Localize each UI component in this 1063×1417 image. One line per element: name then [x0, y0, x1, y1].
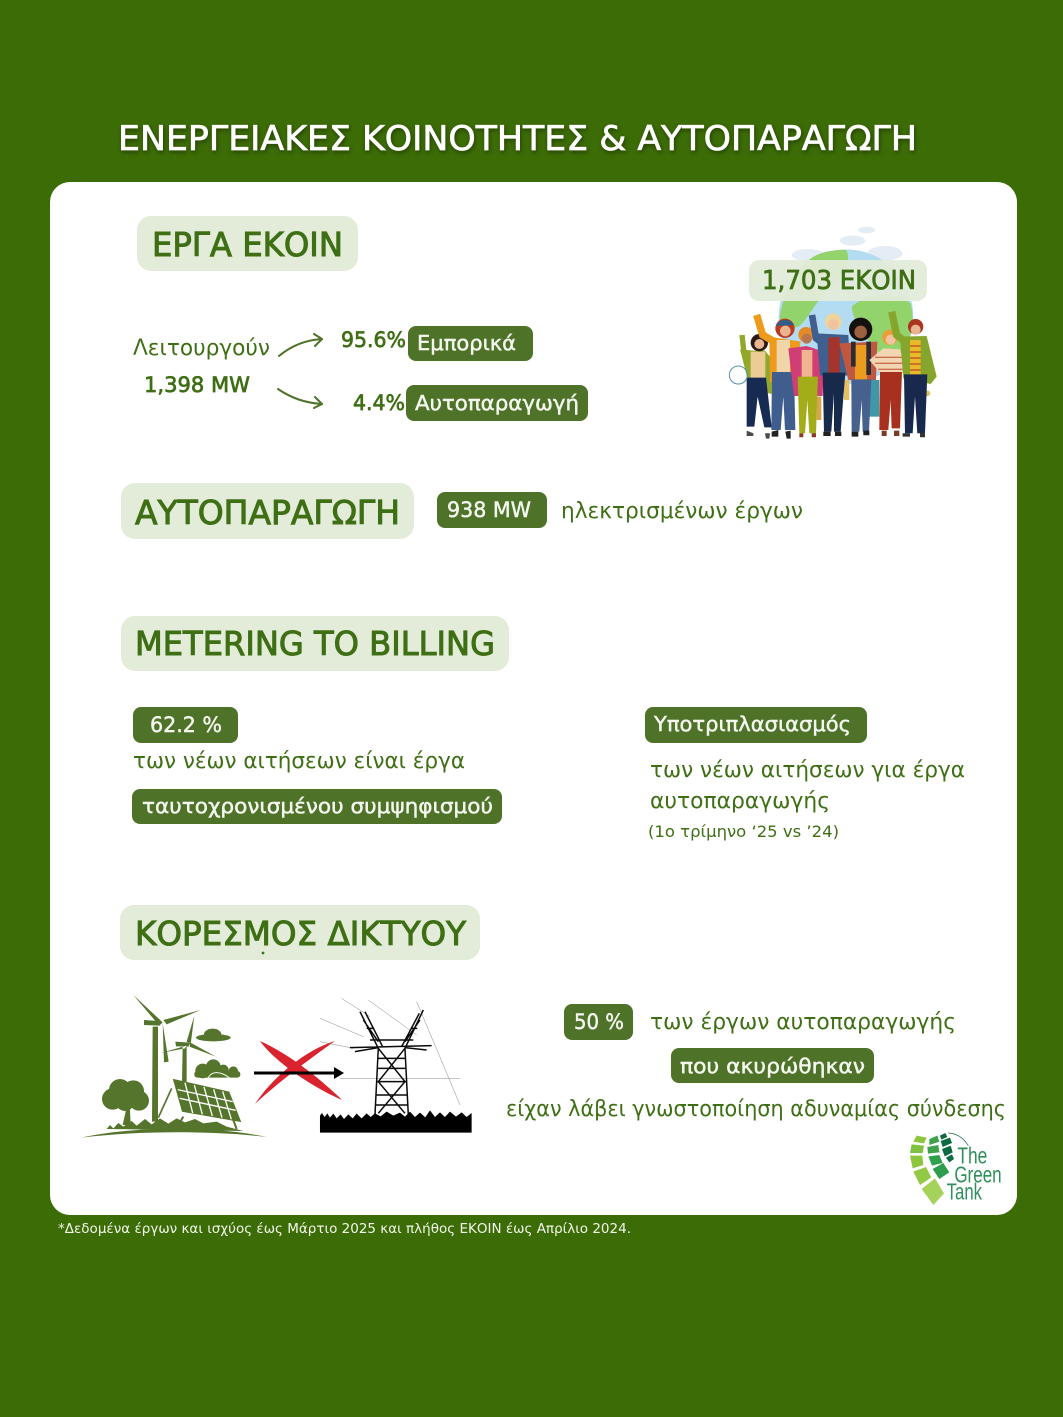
- heading: ΑΥΤΟΠΑΡΑΓΩΓΗ: [121, 483, 414, 539]
- text: electrified projects: ηλεκτρισμένων έργων: [561, 499, 803, 524]
- heading: ΚΟΡΕΣΜΟΣ ΔΙΚΤΥΟΥ: ΚΟΡΕΣΜΟΣ ΔΙΚΤΥΟΥ: [135, 914, 467, 953]
- heading: ΕΡΓΑ ΕΚΟΙΝ: [137, 216, 358, 271]
- cloud 1: [196, 1029, 231, 1041]
- stat: 50 %: 50 %: [574, 1010, 624, 1034]
- illustration: transmission tower: [320, 998, 472, 1133]
- title: ΕΝΕΡΓΕΙΑΚΕΣ ΚΟΙΝΟΤΗΤΕΣ & ΑΥΤΟΠΑΡΑΓΩΓΗ: [118, 119, 917, 159]
- tree: [102, 1079, 149, 1125]
- small turbine: [161, 1016, 216, 1083]
- heading: METERING TO BILLING: METERING TO BILLING: [135, 624, 495, 663]
- badge: 1,703 ΕΚΟΙΝ: [749, 260, 927, 301]
- bicycle wheel: [729, 366, 747, 384]
- stat: 95.6% commercial: [341, 326, 533, 361]
- text: self-production projects: των έργων αυτοπαραγωγής: [650, 1010, 956, 1035]
- stat: 4.4% self-production: 4.4%: [353, 391, 405, 415]
- footnote: *Δεδομένα έργων και ισχύος έως Μάρτιο 2025 και πλήθος ΕΚΟΙΝ έως Απρίλιο 2024.: [58, 1222, 631, 1237]
- label: cancelled: [671, 1048, 874, 1083]
- stat: 938 MW: [437, 492, 547, 528]
- panel: main white card: [50, 182, 1017, 1215]
- arrow: down to self-production: [278, 389, 322, 408]
- logo: The Green Tank: Tank: [947, 1179, 982, 1205]
- arrow: up to commercial: [279, 334, 322, 356]
- stat: 4.4% self-production: Αυτοπαραγωγή: [415, 391, 579, 415]
- cloud 2: [194, 1059, 240, 1078]
- large turbine: [133, 995, 201, 1122]
- globe: [779, 249, 913, 384]
- person 4: [812, 313, 851, 436]
- text: operating capacity: 1,398 MW: [144, 373, 250, 397]
- stat: 95.6% commercial: 95.6%: [341, 328, 406, 352]
- illustration: people and globe: [729, 227, 937, 439]
- section: METERING TO BILLING: [121, 616, 965, 841]
- stat: 938 MW: 938 MW: [447, 498, 531, 522]
- heading: ΑΥΤΟΠΑΡΑΓΩΓΗ: ΑΥΤΟΠΑΡΑΓΩΓΗ: [135, 493, 400, 532]
- stat: 62.2 %: 62.2 %: [150, 713, 222, 737]
- person 6: [869, 330, 905, 436]
- logo: The Green Tank: The: [957, 1143, 987, 1169]
- label: simultaneous netting: ταυτοχρονισμένου συμψηφισμού: [142, 794, 493, 818]
- solar panel: [158, 1080, 240, 1129]
- label: threefold decrease: Υποτριπλασιασμός: [653, 712, 851, 736]
- section: ΑΥΤΟΠΑΡΑΓΩΓΗ: [121, 483, 803, 539]
- arrow: [254, 1067, 344, 1079]
- stat: 50 %: [564, 1004, 633, 1040]
- logo: The Green Tank: Green: [954, 1161, 1002, 1187]
- label: simultaneous netting: [132, 789, 502, 824]
- person 1: [740, 334, 773, 439]
- label: cancelled: που ακυρώθηκαν: [680, 1054, 865, 1078]
- stat: 95.6% commercial: Εμπορικά: [417, 331, 516, 355]
- text: self-production applications: των νέων αιτήσεων για έργα: [650, 758, 965, 783]
- label: threefold decrease: [645, 707, 867, 743]
- text: new applications: των νέων αιτήσεων είναι έργα: [133, 749, 465, 774]
- stat: 4.4% self-production: [353, 385, 588, 421]
- section: ΕΡΓΑ ΕΚΟΙΝ: [133, 216, 937, 439]
- illustration: renewables: [82, 995, 267, 1138]
- section: ΚΟΡΕΣΜΟΣ ΔΙΚΤΥΟΥ: [82, 905, 1006, 1138]
- text: operating capacity: Λειτουργούν: [133, 336, 270, 361]
- person 3: [788, 327, 824, 437]
- heading: METERING TO BILLING: [121, 616, 509, 671]
- heading: ΚΟΡΕΣΜΟΣ ΔΙΚΤΥΟΥ: [120, 905, 480, 960]
- ground: [82, 1118, 267, 1138]
- logo: The Green Tank: [910, 1133, 1002, 1205]
- red cross: [255, 1041, 342, 1104]
- heading: ΕΡΓΑ ΕΚΟΙΝ: ΕΡΓΑ ΕΚΟΙΝ: [152, 225, 343, 264]
- stat: 62.2 %: [133, 707, 238, 743]
- text: self-production applications: (1ο τρίμηνο ‘25 vs ’24): [648, 822, 839, 841]
- text: self-production applications: αυτοπαραγωγής: [650, 789, 830, 814]
- clouds: [792, 227, 902, 261]
- text: self-production applications: [648, 758, 965, 841]
- text: connection notice: είχαν λάβει γνωστοποίηση αδυναμίας σύνδεσης: [506, 1097, 1006, 1122]
- background figures: [817, 380, 930, 420]
- person 2: [757, 315, 801, 439]
- text: operating capacity: [133, 336, 270, 397]
- badge: 1,703 ΕΚΟΙΝ: 1,703 ΕΚΟΙΝ: [762, 266, 916, 296]
- icon: blocked connection: [254, 1041, 344, 1104]
- person 7: [892, 312, 937, 437]
- person 5: [839, 318, 877, 437]
